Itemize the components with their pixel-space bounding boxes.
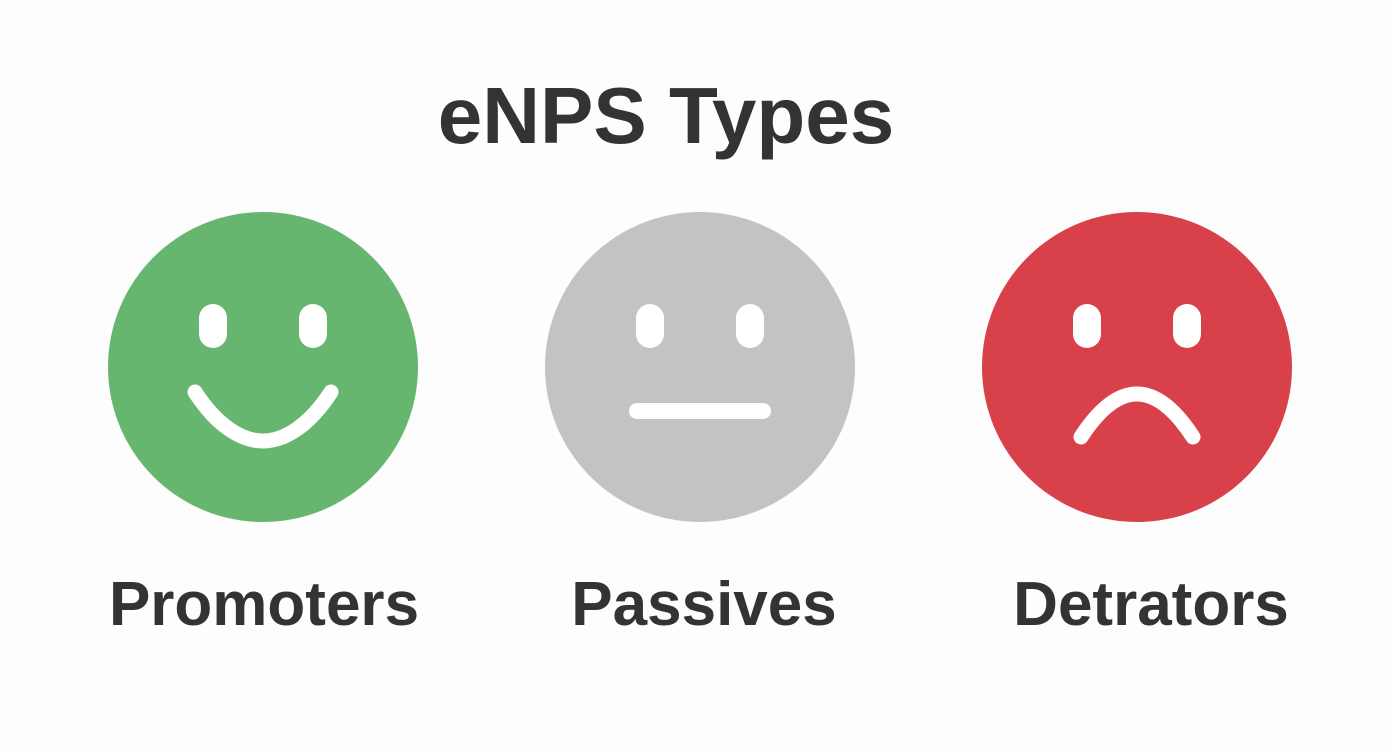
label: detrators: Detrators (1013, 570, 1289, 639)
icon: passives neutral face (545, 212, 855, 522)
icon: promoters smiley (108, 212, 418, 522)
title: eNPS Types (438, 71, 894, 160)
label: passives: Passives (571, 570, 837, 639)
label: promoters: Promoters (109, 570, 419, 639)
icon: detractors frown (982, 212, 1292, 522)
